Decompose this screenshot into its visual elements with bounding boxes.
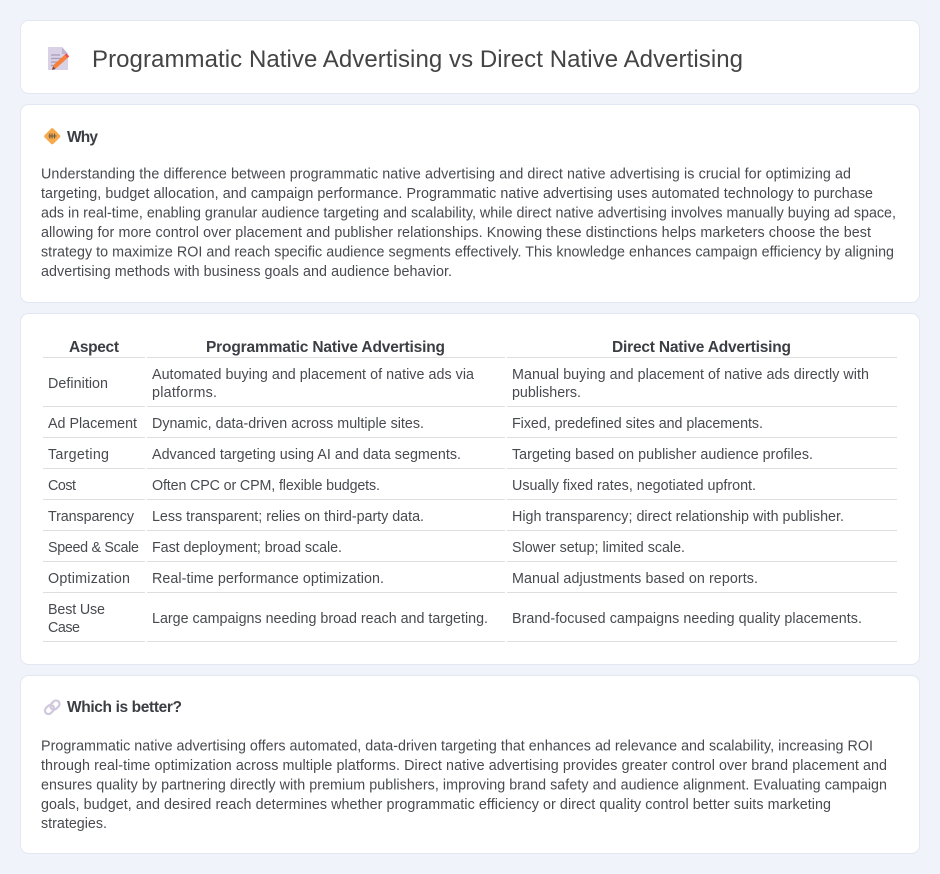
text block: why explanation: advertising methods with business goals and audience behavior. (41, 264, 452, 280)
table header row (69, 339, 791, 356)
heading: why: Why (67, 129, 98, 146)
icon: orange diamond (43, 127, 61, 145)
row: best use case: Best Use (48, 602, 105, 618)
panel: why (20, 104, 920, 302)
row: best use case: Brand-focused campaigns needing quality placements. (512, 611, 862, 627)
row: targeting (48, 447, 813, 463)
row: definition: Definition (48, 376, 108, 392)
row: optimization (48, 571, 758, 587)
row: targeting: Advanced targeting using AI and data segments. (152, 447, 461, 463)
row: definition (48, 367, 869, 401)
row: best use case (48, 602, 862, 636)
row: optimization: Optimization (48, 571, 130, 587)
text block: which is better explanation (41, 738, 887, 832)
heading: which is better: Which is better? (67, 699, 182, 716)
row: ad placement: Dynamic, data-driven across multiple sites. (152, 416, 424, 432)
table header row: Programmatic Native Advertising (206, 339, 445, 356)
table header row: Direct Native Advertising (612, 339, 791, 356)
text block: which is better explanation: ensures quality by partnering directly with premium publishers, improving brand safety and audience alignment. Evaluating campaign (41, 778, 887, 794)
panel: header (20, 20, 920, 94)
row: cost: Cost (48, 478, 76, 494)
row: definition: Manual buying and placement of native ads directly with (512, 367, 869, 383)
row: transparency: Less transparent; relies on third-party data. (152, 509, 424, 525)
text block: which is better explanation: strategies. (41, 816, 107, 832)
row: speed and scale (48, 540, 685, 556)
row: optimization: Manual adjustments based on reports. (512, 571, 758, 587)
row: ad placement (48, 416, 763, 432)
text block: which is better explanation: through real-time optimization across multiple platforms. Direct native advertising provides greater control over brand placement and (41, 758, 887, 774)
row: ad placement: Ad Placement (48, 416, 137, 432)
text block: why explanation (41, 166, 896, 280)
row: speed and scale: Fast deployment; broad scale. (152, 540, 342, 556)
row: targeting: Targeting based on publisher audience profiles. (512, 447, 813, 463)
text block: why explanation: ads in real-time, enabling granular audience targeting and scalability, while direct native advertising involves manually buying ad space, (41, 206, 896, 222)
text block: which is better explanation: Programmatic native advertising offers automated, data-driven targeting that enhances ad relevance and scalability, increasing ROI (41, 738, 873, 754)
row: definition: publishers. (512, 385, 581, 401)
text block: why explanation: targeting, budget allocation, and campaign performance. Programmatic native advertising uses automated technology to purchase (41, 186, 873, 202)
row: targeting: Targeting (48, 447, 109, 463)
title: Programmatic Native Advertising vs Direct Native Advertising (92, 46, 743, 73)
text block: why explanation: strategy to maximize ROI and reach specific audience segments effectively. This knowledge enhances campaign efficiency by aligning (41, 244, 894, 260)
text block: which is better explanation: goals, budget, and desired reach determines whether programmatic efficiency or direct quality control better suits marketing (41, 797, 831, 813)
row: optimization: Real-time performance optimization. (152, 571, 384, 587)
row: speed and scale: Speed & Scale (48, 540, 139, 556)
row: definition: Automated buying and placement of native ads via (152, 367, 474, 383)
row: definition: platforms. (152, 385, 217, 401)
icon: document with pencil (48, 47, 69, 70)
panel: comparison table (20, 314, 920, 664)
row: transparency (48, 509, 844, 525)
table header row: Aspect (69, 339, 119, 356)
text block: why explanation: allowing for more control over placement and publisher relationships. Knowing these distinctions helps marketers choose the best (41, 225, 871, 241)
row: cost (48, 478, 756, 494)
text block: why explanation: Understanding the difference between programmatic native advertising and direct native advertising is crucial for optimizing ad (41, 166, 851, 182)
row: transparency: High transparency; direct relationship with publisher. (512, 509, 844, 525)
row: best use case: Large campaigns needing broad reach and targeting. (152, 611, 488, 627)
row: ad placement: Fixed, predefined sites and placements. (512, 416, 763, 432)
row: speed and scale: Slower setup; limited scale. (512, 540, 685, 556)
panel: which is better (20, 676, 920, 854)
row: transparency: Transparency (48, 509, 135, 525)
row: best use case: Case (48, 620, 80, 636)
icon: chain link (43, 699, 61, 716)
row: cost: Often CPC or CPM, flexible budgets. (152, 478, 380, 494)
row: cost: Usually fixed rates, negotiated upfront. (512, 478, 756, 494)
